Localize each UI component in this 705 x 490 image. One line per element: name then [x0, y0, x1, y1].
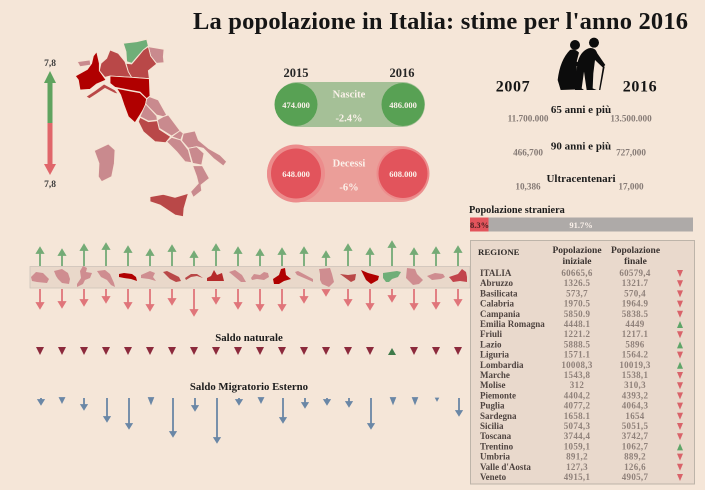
table initial population: 1059,1	[564, 441, 590, 451]
up arrows	[37, 242, 461, 266]
table region names: Toscana	[480, 431, 512, 441]
external migration heading: Saldo Migratorio Esterno	[190, 381, 308, 393]
table final population: 5051,5	[622, 421, 648, 431]
deaths pill: -6%	[339, 182, 359, 194]
elderly 90 plus: 727,000	[616, 148, 646, 158]
deaths pill: 608.000	[389, 169, 417, 179]
deaths pill	[267, 144, 430, 202]
table header	[478, 246, 660, 267]
table final population: 4449	[625, 319, 645, 329]
table final population: 5896	[625, 339, 645, 349]
births pill: 486.000	[389, 100, 417, 110]
foreign population bar: 8.3%	[470, 220, 489, 230]
table final population: 1217.1	[622, 329, 648, 339]
table final population: 5838.5	[622, 309, 648, 319]
table header: Popolazione	[552, 246, 602, 256]
births pill: 2016	[390, 66, 414, 80]
table final population: 1321.7	[622, 278, 648, 288]
table region names: Liguria	[480, 350, 510, 360]
table region names: ITALIA	[480, 268, 512, 278]
table region names: Calabria	[480, 299, 515, 309]
legend scale arrow	[44, 59, 56, 190]
table region names: Abruzzo	[480, 278, 513, 288]
elderly 65 plus	[508, 104, 652, 124]
centenarians	[515, 173, 644, 192]
table final population: 4393,2	[622, 390, 648, 400]
foreign population bar: Popolazione straniera	[469, 205, 565, 216]
table region names: Campania	[480, 309, 521, 319]
births pill: -2.4%	[335, 114, 363, 124]
births pill: 474.000	[282, 100, 310, 110]
table region names: Valle d'Aosta	[480, 462, 531, 472]
natural balance heading: Saldo naturale	[215, 332, 283, 344]
elderly 90 plus: 466,700	[513, 148, 543, 158]
region silhouettes	[31, 266, 467, 287]
title: La popolazione in Italia: stime per l'anno 2016	[193, 8, 688, 35]
table region names: Emilia Romagna	[480, 319, 545, 329]
table initial population: 1970.5	[564, 299, 590, 309]
table initial population: 1543,8	[564, 370, 590, 380]
table initial population: 573,7	[566, 288, 588, 298]
table initial population	[561, 268, 593, 482]
table final population: 310,3	[624, 380, 646, 390]
table region names: Lazio	[480, 339, 502, 349]
table header: REGIONE	[478, 247, 520, 257]
table initial population: 4077,2	[564, 401, 590, 411]
table initial population: 1221.2	[564, 329, 590, 339]
table initial population: 891,2	[566, 452, 588, 462]
legend scale arrow: 7,8	[44, 180, 56, 190]
elderly 90 plus: 90 anni e più	[551, 140, 611, 152]
table final population: 1654	[625, 411, 645, 421]
map of Italy by region	[75, 39, 227, 217]
table initial population: 60665,6	[561, 268, 593, 278]
elderly years: 2016	[623, 78, 657, 96]
table region names	[480, 268, 545, 482]
external migration arrows	[38, 398, 462, 442]
table initial population: 5888.5	[564, 339, 590, 349]
region band	[30, 266, 470, 288]
table region names: Marche	[480, 370, 510, 380]
table region names: Sardegna	[480, 411, 517, 421]
elderly years	[496, 78, 657, 96]
elderly 65 plus: 65 anni e più	[551, 104, 611, 116]
elderly years: 2007	[496, 78, 530, 96]
table final population: 570,4	[624, 288, 646, 298]
births pill: Nascite	[333, 90, 366, 100]
table region names: Veneto	[480, 472, 507, 482]
table final population: 1538,1	[622, 370, 648, 380]
table final population: 1964.9	[622, 299, 648, 309]
table region names: Basilicata	[480, 288, 518, 298]
elderly 65 plus: 13.500.000	[610, 114, 652, 124]
table initial population: 312	[570, 380, 584, 390]
table final population: 10019,3	[619, 360, 651, 370]
legend scale arrow: 7,8	[44, 59, 56, 69]
table final population: 60579,4	[619, 268, 651, 278]
table final population: 3742,7	[622, 431, 648, 441]
table final population: 1564.2	[622, 350, 648, 360]
natural balance markers	[36, 347, 462, 355]
table initial population: 127,3	[566, 462, 588, 472]
table initial population: 3744,4	[564, 431, 590, 441]
table initial population: 4448.1	[564, 319, 590, 329]
table header: iniziale	[562, 257, 592, 267]
down arrows	[37, 289, 461, 315]
table initial population: 1571.1	[564, 350, 590, 360]
table initial population: 4404,2	[564, 390, 590, 400]
table region names: Friuli	[480, 329, 502, 339]
table header: finale	[624, 257, 647, 267]
table region names: Molise	[480, 380, 506, 390]
deaths pill: Decessi	[333, 158, 365, 170]
table initial population: 5074,3	[564, 421, 590, 431]
table final population: 4905,7	[622, 472, 648, 482]
table region names: Lombardia	[480, 360, 524, 370]
table panel: regions	[470, 240, 694, 484]
table region names: Umbria	[480, 452, 510, 462]
foreign population bar: 91.7%	[569, 220, 593, 230]
deaths pill: 648.000	[282, 169, 310, 179]
table initial population: 5850.9	[564, 309, 590, 319]
table region names: Trentino	[480, 441, 514, 451]
centenarians: 10,386	[515, 182, 541, 192]
table region names: Sicilia	[480, 421, 504, 431]
table region names: Piemonte	[480, 390, 516, 400]
table final population: 126,6	[624, 462, 646, 472]
foreign population bar	[469, 205, 693, 232]
table initial population: 10008,3	[561, 360, 593, 370]
births pill	[274, 66, 425, 127]
table trend markers	[677, 270, 683, 481]
table region names: Puglia	[480, 401, 505, 411]
centenarians: 17,000	[618, 182, 644, 192]
elderly 65 plus: 11.700.000	[508, 114, 549, 124]
table final population: 4064,3	[622, 401, 648, 411]
table initial population: 1658.1	[564, 411, 590, 421]
table header: Popolazione	[611, 246, 660, 256]
table initial population: 4915,1	[564, 472, 590, 482]
table final population: 889,2	[624, 452, 646, 462]
icon: elderly couple	[558, 38, 605, 90]
elderly 90 plus	[513, 140, 646, 158]
table initial population: 1326.5	[564, 278, 590, 288]
centenarians: Ultracentenari	[546, 173, 616, 185]
table final population	[619, 268, 651, 482]
births pill: 2015	[284, 66, 308, 80]
table final population: 1062,7	[622, 441, 648, 451]
